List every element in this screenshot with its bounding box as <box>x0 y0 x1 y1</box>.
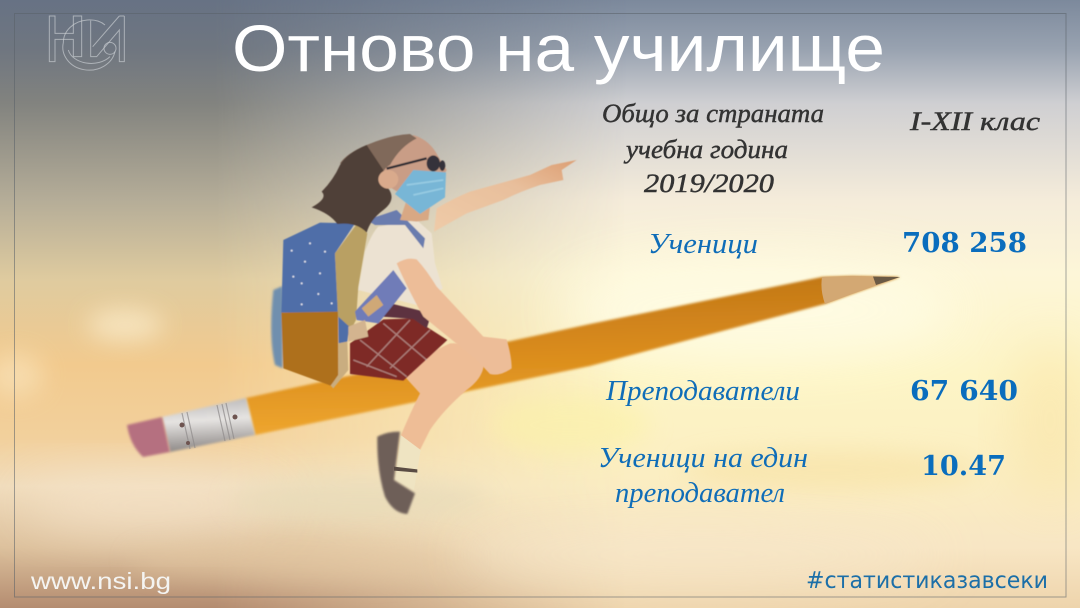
website link: www.nsi.bg <box>30 568 171 594</box>
row label: students: Ученици <box>648 229 758 260</box>
row label: teachers: Преподаватели <box>605 376 800 407</box>
pencil <box>127 276 900 457</box>
girl upper body, backpack and head <box>271 134 577 388</box>
row label: students per teacher <box>598 443 808 509</box>
row value: students per teacher: 10.47 <box>921 451 1006 482</box>
hashtag: #статистиказавсеки <box>806 568 1048 594</box>
heading: national total, school year <box>602 99 824 198</box>
heading: national total, school year: 2019/2020 <box>644 169 774 198</box>
illustration: girl flying on a pencil <box>127 134 900 514</box>
heading: national total, school year: Общо за страната <box>602 99 824 128</box>
row value: teachers: 67 640 <box>910 376 1018 407</box>
row label: students per teacher: преподавател <box>615 478 785 509</box>
heading: national total, school year: учебна година <box>623 135 788 164</box>
girl legs and shoe <box>377 343 484 514</box>
logo: NSI monogram <box>49 16 124 70</box>
column heading: grades: I-XII клас <box>909 107 1041 136</box>
row value: students: 708 258 <box>902 228 1027 259</box>
row label: students per teacher: Ученици на един <box>598 443 808 474</box>
title: Отново на училище <box>232 11 885 85</box>
